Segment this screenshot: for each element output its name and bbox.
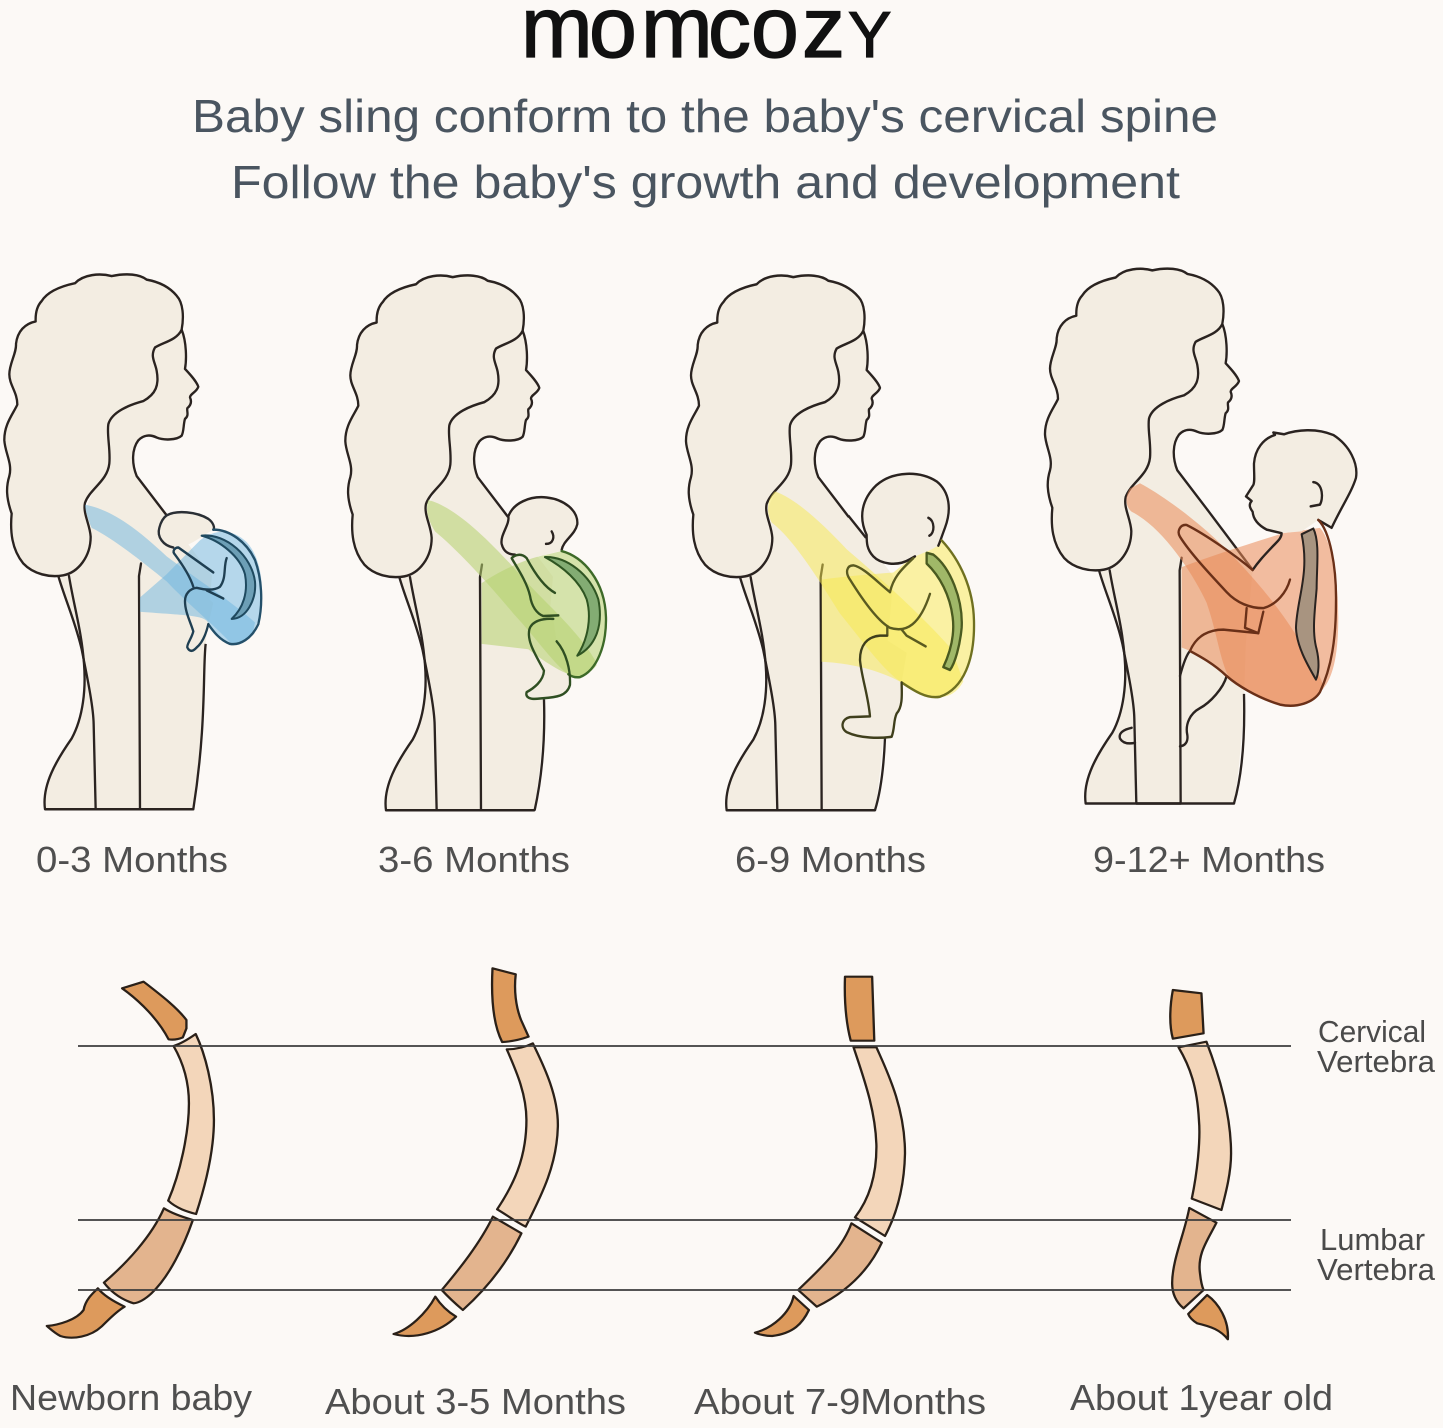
body front line: [1234, 694, 1244, 804]
cervical segment: [122, 982, 186, 1040]
spine chart: 7-9 months: [755, 977, 905, 1336]
label: 6-9 months: 6-9 Months: [735, 839, 926, 880]
panel: mother and baby 3-6 months: [345, 275, 606, 810]
label: lumbar vertebra: [1317, 1222, 1436, 1287]
stage labels: [10, 1377, 1333, 1422]
sling strap: [85, 505, 255, 644]
spine chart: newborn: [47, 982, 214, 1338]
neck extension line: [1207, 510, 1253, 570]
label: cervical vertebra: [1317, 1014, 1436, 1079]
label: about 3-5 months: About 3-5 Months: [325, 1381, 626, 1422]
sling panel: [140, 532, 262, 645]
age labels: [36, 839, 1325, 880]
panel: mother and baby 6-9 months: [686, 275, 974, 810]
title line 2: Follow the baby's growth and development: [231, 156, 1180, 208]
thoracic segment: [497, 1043, 558, 1227]
panel: mother and baby 0-3 months: [4, 274, 262, 809]
sling panel: [822, 540, 974, 697]
cervical segment: [845, 977, 874, 1041]
baby outlines: [843, 474, 974, 738]
label: lumbar vertebra: Vertebra: [1317, 1252, 1436, 1287]
thoracic segment: [168, 1034, 214, 1214]
thoracic segment: [854, 1047, 905, 1236]
sling strap: [427, 500, 597, 676]
spine: [545, 557, 600, 656]
thoracic segment: [1179, 1042, 1231, 1210]
baby outlines: [1179, 430, 1356, 706]
baby leg: [843, 636, 907, 738]
title line 1: Baby sling conform to the baby's cervical spine: [192, 90, 1218, 142]
baby head: [1246, 430, 1356, 533]
neck extension line: [848, 516, 866, 538]
tail segment: [47, 1288, 125, 1338]
baby outlines: [501, 497, 606, 699]
spine chart: 1 year: [1170, 990, 1231, 1339]
label: 0-3 months: 0-3 Months: [36, 839, 228, 880]
spine: [1296, 529, 1319, 680]
lumbar segment: [442, 1217, 521, 1310]
baby head: [862, 474, 949, 564]
baby head: [501, 497, 577, 556]
body front line: [535, 699, 544, 810]
sling strap: [768, 491, 963, 697]
sling panel: [1182, 528, 1338, 706]
mother belly hand and leg: [1120, 651, 1227, 746]
label: newborn baby: Newborn baby: [10, 1377, 252, 1418]
label: cervical vertebra: Cervical: [1318, 1014, 1426, 1049]
lumbar segment: [798, 1223, 882, 1307]
sling panel: [482, 551, 606, 677]
lumbar segment: [1172, 1208, 1216, 1308]
label: 3-6 months: 3-6 Months: [378, 839, 570, 880]
label: about 7-9 months: About 7-9Months: [694, 1381, 986, 1422]
sling strap: [1126, 483, 1323, 706]
tail segment: [755, 1296, 809, 1336]
body front line: [875, 738, 885, 810]
title: [192, 90, 1218, 208]
tail segment: [1188, 1295, 1228, 1339]
baby leg: [526, 619, 570, 699]
cervical segment: [492, 968, 529, 1042]
label: lumbar vertebra: Lumbar: [1320, 1222, 1425, 1257]
label: about 1 year old: About 1year old: [1070, 1377, 1333, 1418]
spine: [202, 535, 255, 619]
spine: [927, 553, 962, 670]
baby leg: [185, 588, 213, 651]
spine chart: 3-5 months: [394, 968, 558, 1336]
baby outlines: [159, 512, 261, 651]
label: cervical vertebra: Vertebra: [1317, 1044, 1436, 1079]
label: 9-12+ months: 9-12+ Months: [1093, 839, 1325, 880]
tail segment: [394, 1297, 456, 1336]
panel: mother and baby 9-12+ months: [1045, 269, 1356, 804]
logo: momcozy: Y: [848, 0, 891, 71]
reference lines: [78, 1046, 1291, 1290]
lumbar segment: [104, 1208, 193, 1303]
baby head: [159, 512, 214, 548]
body front line: [193, 644, 206, 809]
cervical segment: [1170, 990, 1204, 1039]
